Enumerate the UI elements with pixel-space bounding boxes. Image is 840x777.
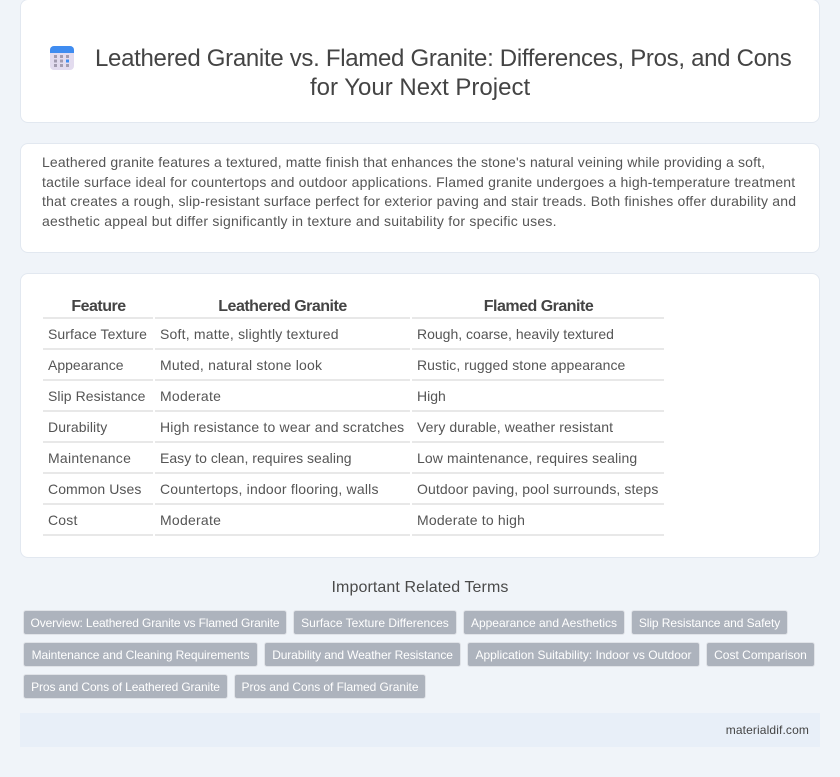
table header: Leathered Granite — [218, 298, 347, 315]
row: common uses: Outdoor paving, pool surrounds, steps — [417, 481, 658, 497]
intro text: that creates a rough, slip-resistant surface perfect for exterior paving and stair treads. Both finishes offer durability and — [42, 193, 796, 209]
comparison table panel — [20, 273, 820, 558]
row: common uses: Common Uses — [48, 481, 141, 497]
related terms tags — [23, 610, 815, 699]
row: maintenance: Maintenance — [48, 450, 131, 466]
related terms heading: Important Related Terms — [332, 579, 508, 596]
intro text: Leathered granite features a textured, matte finish that enhances the stone's natural veining while providing a soft, — [42, 154, 765, 170]
row: surface texture: Soft, matte, slightly textured — [160, 326, 339, 342]
table — [43, 298, 664, 536]
intro text: aesthetic appeal but differ significantly in texture and suitability for specific uses. — [42, 213, 557, 229]
tag — [23, 642, 258, 667]
row: appearance: Muted, natural stone look — [160, 357, 322, 373]
tag: Slip Resistance and Safety — [639, 616, 780, 630]
tag: Surface Texture Differences — [301, 616, 449, 630]
row: surface texture: Rough, coarse, heavily textured — [417, 326, 614, 342]
tag: Pros and Cons of Flamed Granite — [242, 680, 418, 694]
row: appearance: Rustic, rugged stone appearance — [417, 357, 625, 373]
row: durability: Durability — [48, 419, 107, 435]
row: maintenance: Low maintenance, requires sealing — [417, 450, 637, 466]
tag — [631, 610, 788, 635]
tag: Appearance and Aesthetics — [471, 616, 617, 630]
row: slip resistance: High — [417, 388, 446, 404]
title — [95, 45, 791, 101]
icon: calendar — [50, 46, 74, 70]
tag — [706, 642, 815, 667]
tag: Maintenance and Cleaning Requirements — [32, 648, 249, 662]
header panel — [20, 0, 820, 123]
row: surface texture: Surface Texture — [48, 326, 147, 342]
row: slip resistance: Moderate — [160, 388, 221, 404]
row: durability: Very durable, weather resistant — [417, 419, 613, 435]
row: cost — [48, 512, 525, 528]
title: Leathered Granite vs. Flamed Granite: Differences, Pros, and Cons — [95, 45, 791, 72]
table header: Feature — [71, 298, 126, 315]
row: common uses: Countertops, indoor flooring, walls — [160, 481, 379, 497]
tag — [23, 610, 287, 635]
tag: Cost Comparison — [714, 648, 807, 662]
tag: Pros and Cons of Leathered Granite — [31, 680, 220, 694]
row: cost: Cost — [48, 512, 78, 528]
row: surface texture — [48, 326, 614, 342]
tag — [23, 674, 228, 699]
row: durability: High resistance to wear and scratches — [160, 419, 404, 435]
row: appearance: Appearance — [48, 357, 124, 373]
intro panel — [20, 143, 820, 253]
footer source: materialdif.com — [726, 723, 809, 737]
table header: Flamed Granite — [484, 298, 593, 315]
intro text — [42, 154, 796, 229]
row: cost: Moderate — [160, 512, 221, 528]
row: cost: Moderate to high — [417, 512, 525, 528]
tag: Durability and Weather Resistance — [272, 648, 453, 662]
tag — [293, 610, 457, 635]
row: maintenance: Easy to clean, requires sealing — [160, 450, 352, 466]
table header — [71, 298, 594, 315]
tag: Overview: Leathered Granite vs Flamed Granite — [31, 616, 279, 630]
row: maintenance — [48, 450, 637, 466]
tag — [463, 610, 625, 635]
title: for Your Next Project — [310, 74, 530, 101]
tag: Application Suitability: Indoor vs Outdoor — [475, 648, 692, 662]
footer bar — [20, 713, 820, 747]
row: slip resistance: Slip Resistance — [48, 388, 146, 404]
row: common uses — [48, 481, 658, 497]
row: durability — [48, 419, 613, 435]
tag — [264, 642, 461, 667]
row: appearance — [48, 357, 625, 373]
tag — [234, 674, 426, 699]
intro text: tactile surface ideal for countertops and outdoor applications. Flamed granite undergoes a high-temperature treatment — [42, 174, 795, 190]
tag — [467, 642, 700, 667]
row: slip resistance — [48, 388, 446, 404]
